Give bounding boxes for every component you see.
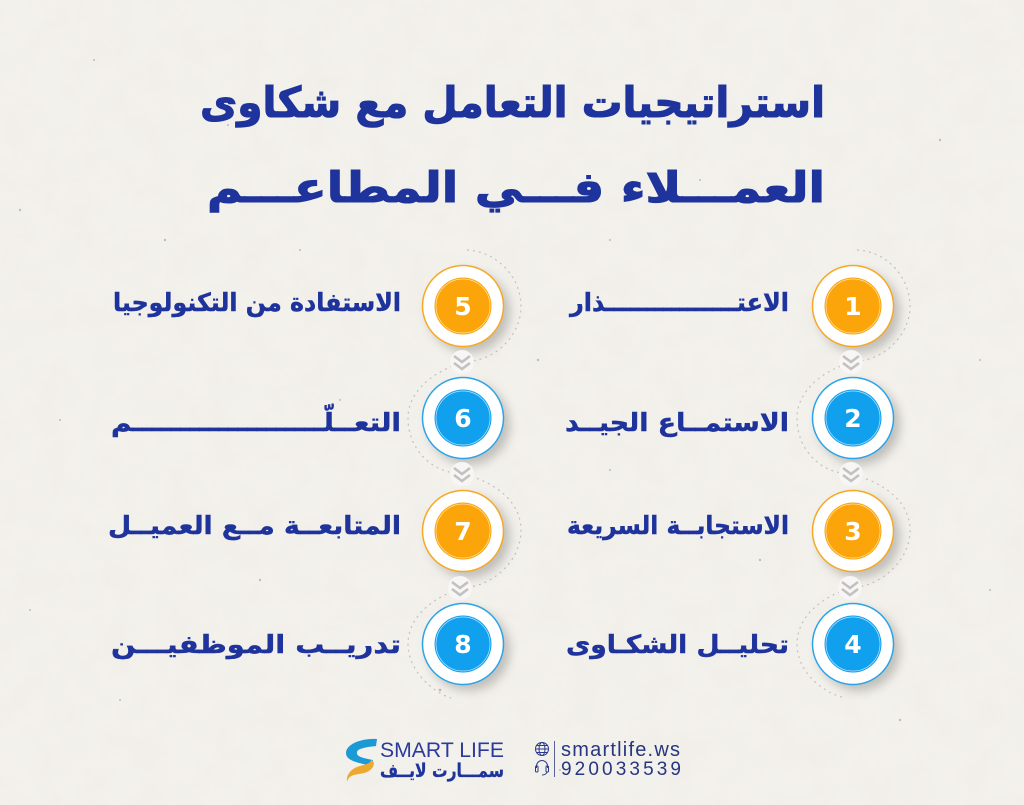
step 8 — [111, 604, 510, 691]
chevron 2 to 3 — [839, 462, 863, 486]
label 5: الاستفادة من التكنولوجيا — [113, 288, 401, 318]
decorative dashed connector: right column — [797, 250, 910, 698]
step 2 — [565, 378, 900, 465]
logo arabic name: سمـــارت لايــف — [380, 760, 504, 782]
number badge 4: 4 — [844, 630, 862, 659]
chevron 6 to 7 — [450, 462, 474, 486]
number badge 8 — [422, 604, 510, 691]
number badge 3 — [812, 490, 900, 578]
label 1: الاعتــــــــــــــــذار — [568, 288, 789, 317]
chevron 3 to 4 — [838, 576, 862, 600]
step 1 — [568, 266, 900, 353]
decorative dashed connector: left column — [408, 250, 521, 698]
step 4 — [566, 604, 900, 691]
number badge 8: 8 — [454, 630, 472, 659]
contact divider — [554, 741, 555, 777]
number badge 2: 2 — [844, 404, 862, 433]
number badge 2 — [812, 378, 900, 465]
number badge 1 — [812, 266, 900, 353]
label 6: التعــلّــــــــــــــــــــم — [111, 404, 401, 437]
footer logo — [346, 739, 504, 782]
number badge 7 — [422, 490, 510, 578]
logo wordmark: SMART LIFE — [380, 739, 504, 762]
icon: globe — [536, 742, 548, 756]
step 6 — [111, 378, 510, 465]
footer contact — [536, 739, 681, 780]
label 8: تدريــب الموظفيـــن — [111, 630, 401, 660]
title — [200, 78, 825, 213]
number badge 1: 1 — [844, 292, 862, 321]
number badge 6 — [422, 378, 510, 465]
step 7 — [108, 490, 510, 578]
chevron 5 to 6 — [450, 350, 474, 374]
number badge 4 — [812, 604, 900, 691]
label 7: المتابعــة مــع العميــل — [108, 511, 401, 541]
icon: headset — [536, 761, 548, 775]
website: smartlife.ws — [561, 739, 680, 761]
number badge 3: 3 — [844, 517, 862, 546]
number badge 5: 5 — [454, 292, 472, 321]
label 4: تحليــل الشكـاوى — [566, 630, 789, 660]
step 3 — [567, 490, 900, 578]
label 2: الاستمــاع الجيــد — [565, 408, 789, 437]
number badge 6: 6 — [454, 404, 472, 433]
phone: 920033539 — [561, 759, 681, 780]
step 5 — [113, 266, 510, 353]
number badge 5 — [422, 266, 510, 353]
logo mark — [346, 739, 377, 782]
chevron 1 to 2 — [839, 350, 863, 374]
title: استراتيجيات التعامل مع شكاوى — [200, 78, 825, 128]
number badge 7: 7 — [454, 517, 472, 546]
title: العمـــلاء فـــي المطاعـــم — [207, 163, 825, 213]
label 3: الاستجابــة السريعة — [567, 511, 789, 541]
chevron 7 to 8 — [448, 576, 472, 600]
